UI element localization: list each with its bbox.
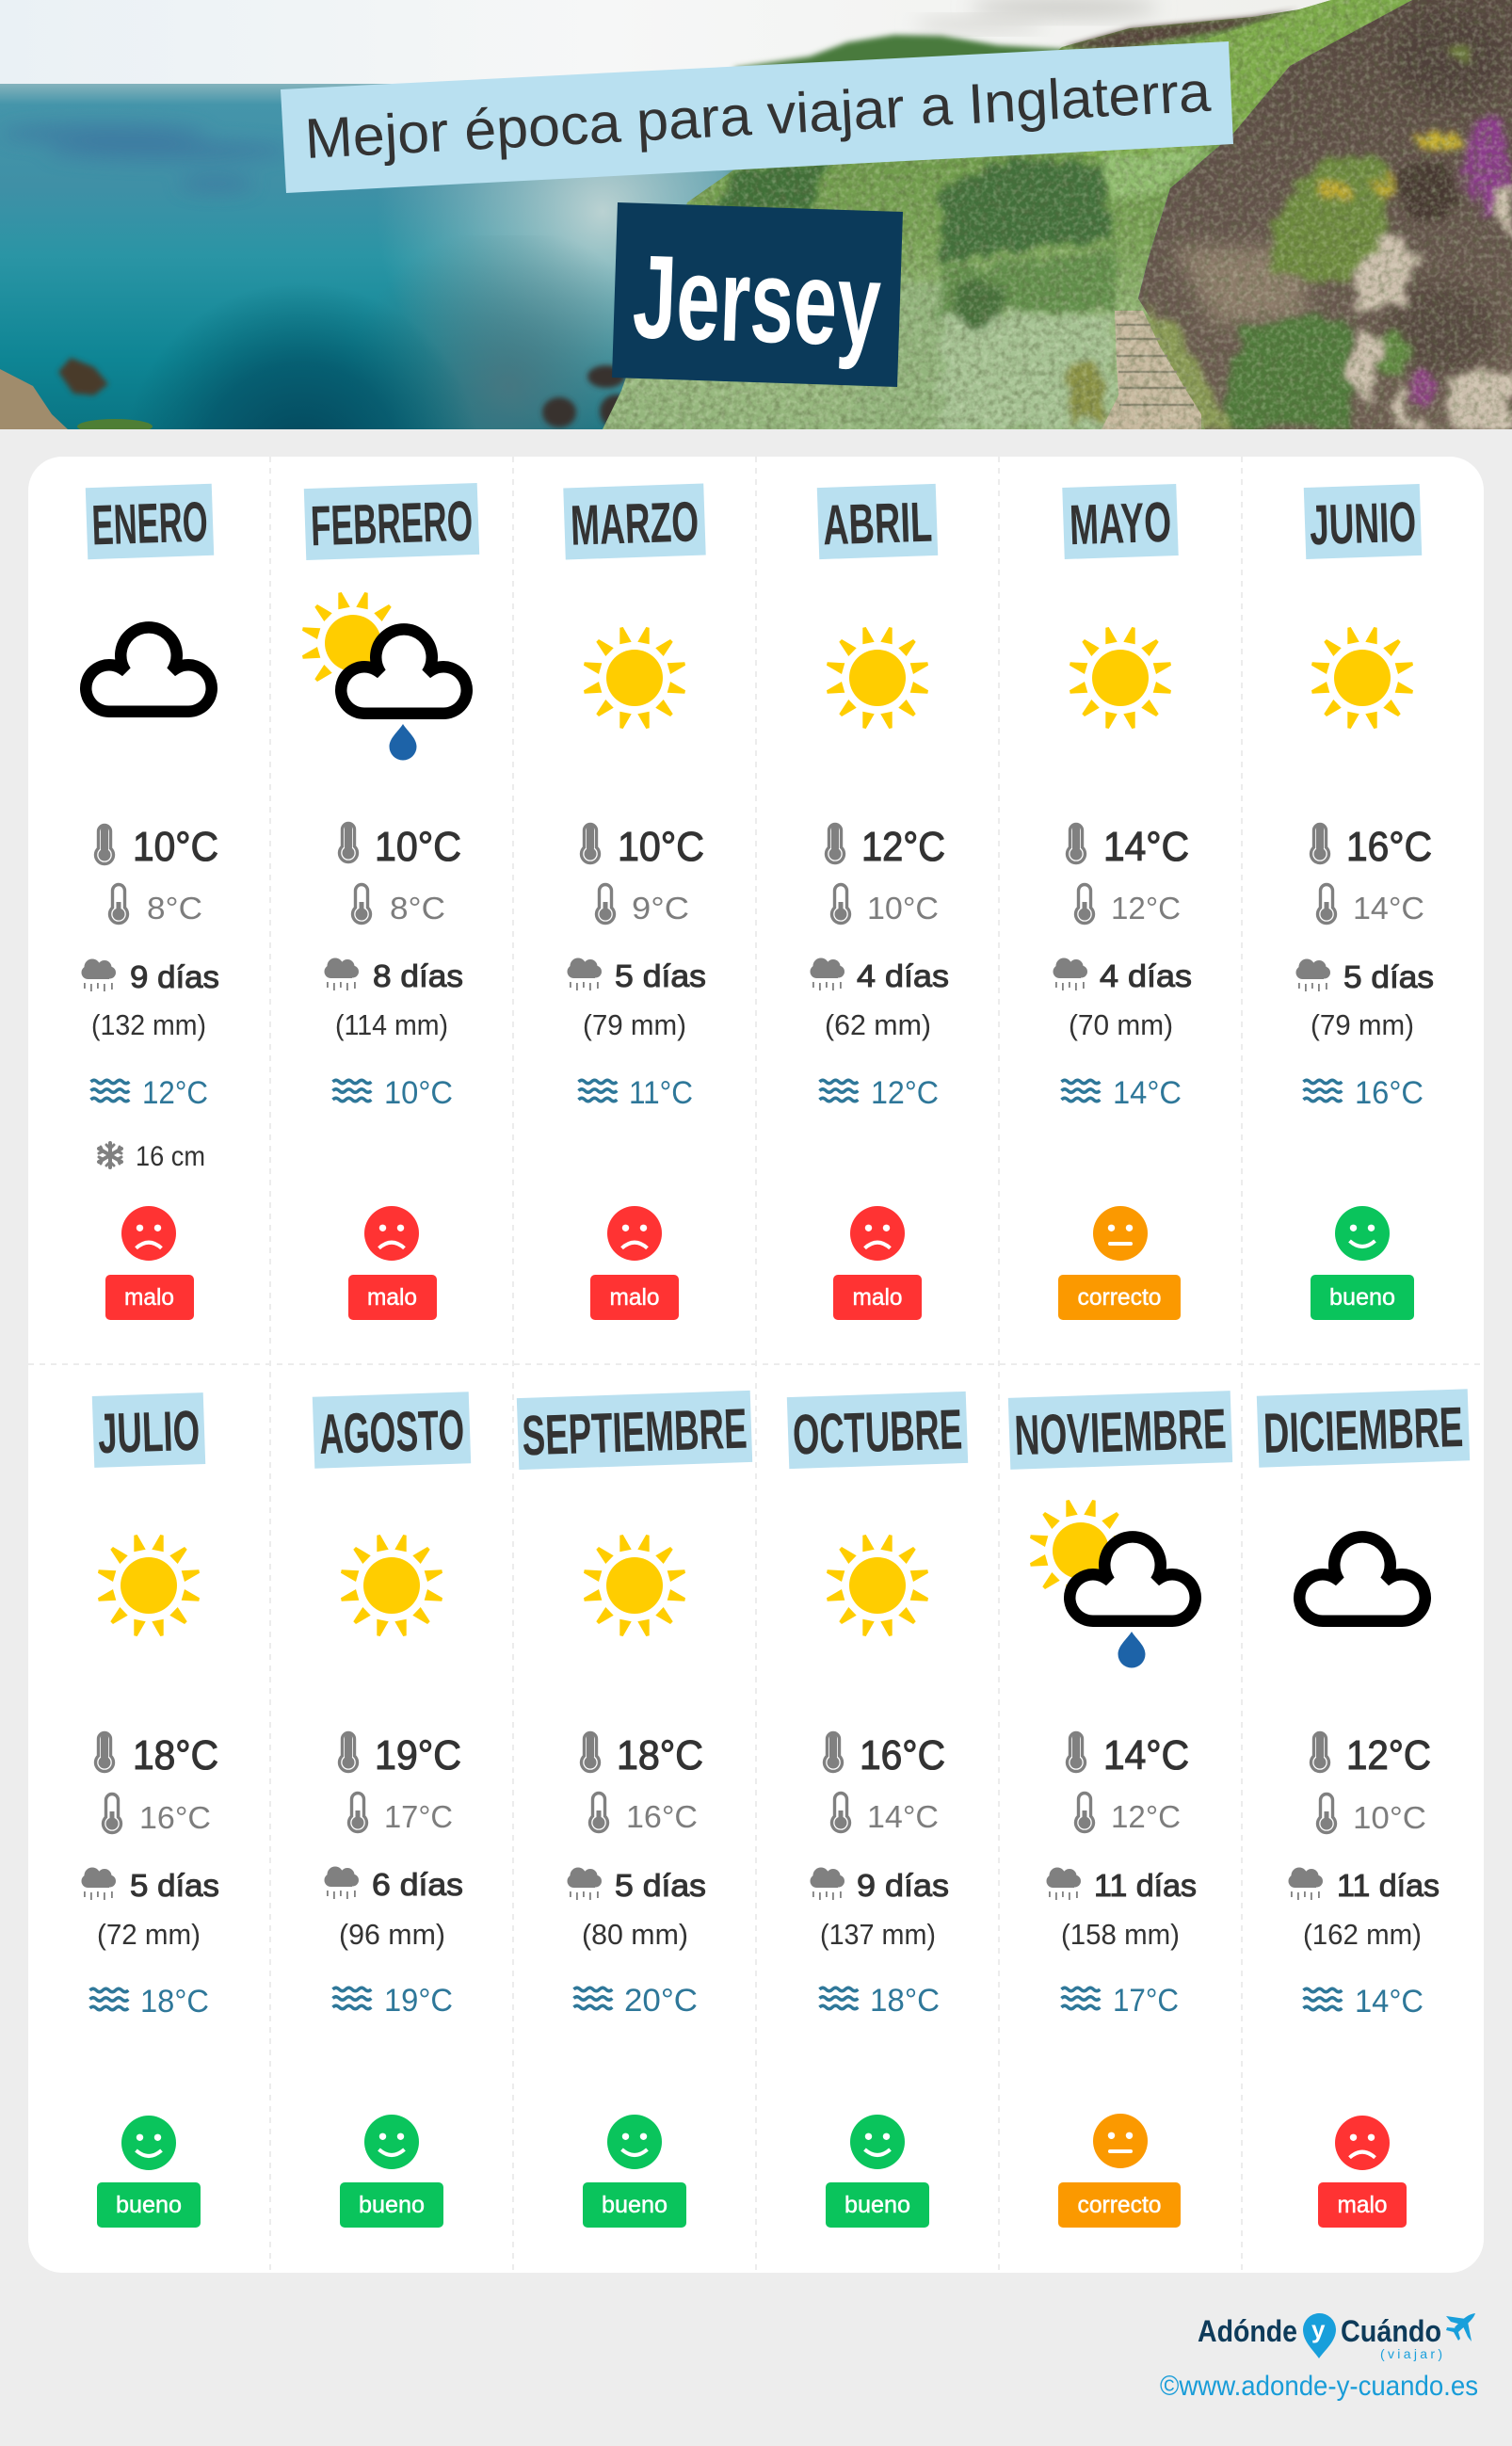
rainy days: 5 días xyxy=(615,1868,706,1903)
max temperature xyxy=(1068,1732,1189,1778)
sea temperature: 16°C xyxy=(1355,1075,1424,1111)
min temperature: 12°C xyxy=(1111,891,1181,925)
weather icon: cloud xyxy=(1299,1537,1425,1621)
month label xyxy=(1008,1391,1232,1470)
max temperature: 10°C xyxy=(618,824,704,870)
rainy days: 5 días xyxy=(130,1868,219,1903)
rainfall: (72 mm) xyxy=(97,1918,201,1951)
rainy days xyxy=(324,958,463,993)
month: abril xyxy=(810,484,949,1320)
rating badge: malo xyxy=(124,1284,174,1311)
snow xyxy=(99,1141,205,1172)
max temperature: 10°C xyxy=(133,824,218,870)
sea temperature xyxy=(819,1075,939,1111)
rainfall: (80 mm) xyxy=(582,1918,688,1951)
rainy days xyxy=(567,1868,706,1903)
month: junio xyxy=(1295,484,1434,1320)
destination name box xyxy=(612,202,903,387)
sea temperature: 17°C xyxy=(1113,1983,1179,2019)
rainy days xyxy=(810,958,949,993)
rainfall: (158 mm) xyxy=(1061,1918,1180,1951)
rating badge: malo xyxy=(853,1284,902,1311)
min temperature xyxy=(1318,1794,1426,1835)
month: enero xyxy=(81,484,219,1320)
min temperature: 8°C xyxy=(390,891,445,925)
rainy days xyxy=(1295,958,1434,994)
rainfall: (132 mm) xyxy=(91,1008,206,1041)
month label: MARZO xyxy=(570,490,700,557)
weather icon: sun xyxy=(584,627,685,729)
rainfall: (79 mm) xyxy=(583,1008,686,1041)
month label: JUNIO xyxy=(1309,491,1417,556)
rainy days xyxy=(567,958,706,993)
max temperature: 14°C xyxy=(1103,824,1189,870)
month: diciembre xyxy=(1257,1389,1470,2228)
month label xyxy=(563,484,706,559)
month: septiembre xyxy=(517,1391,752,2228)
rating badge xyxy=(1311,1275,1414,1320)
month label xyxy=(304,483,479,560)
sea temperature: 12°C xyxy=(142,1075,208,1111)
sea temperature xyxy=(1303,1075,1424,1111)
header photo: sea and green cliffs xyxy=(0,0,1512,434)
rating face xyxy=(1335,1206,1390,1261)
rating badge: malo xyxy=(610,1284,659,1311)
weather icon: cloud xyxy=(86,627,212,712)
rainy days xyxy=(1053,958,1192,993)
rating face xyxy=(1093,1206,1148,1261)
max temperature xyxy=(339,1732,461,1778)
month label: ABRIL xyxy=(822,491,933,556)
min temperature xyxy=(589,1793,698,1834)
month label: OCTUBRE xyxy=(792,1398,963,1466)
rainy days xyxy=(81,1868,219,1903)
max temperature xyxy=(96,1732,218,1778)
rating face xyxy=(1093,2114,1148,2168)
vegetation patches on the cliff xyxy=(1142,42,1510,429)
sea temperature: 20°C xyxy=(624,1983,698,2019)
sea temperature: 12°C xyxy=(871,1075,939,1111)
title text: Mejor época para viajar a Inglaterra xyxy=(303,60,1213,170)
rating badge: correcto xyxy=(1077,2192,1162,2218)
month label xyxy=(1304,484,1422,559)
month label xyxy=(92,1392,205,1468)
title band xyxy=(281,41,1233,193)
weather icon: sun xyxy=(1311,627,1413,729)
weather icon: sun xyxy=(827,627,928,729)
month label xyxy=(1062,484,1179,559)
max temperature: 12°C xyxy=(861,824,945,870)
rating face xyxy=(121,1206,176,1261)
min temperature xyxy=(348,1793,453,1834)
max temperature xyxy=(1068,824,1189,870)
rating face xyxy=(850,2115,905,2169)
green hillside xyxy=(603,0,1412,429)
max temperature xyxy=(1311,1732,1431,1778)
rating badge xyxy=(1318,2182,1407,2228)
month label xyxy=(787,1392,968,1469)
sea temperature xyxy=(574,1983,698,2019)
rainy days: 4 días xyxy=(1100,958,1192,993)
sea temperature xyxy=(333,1075,453,1111)
rainy days: 5 días xyxy=(1343,959,1434,994)
rating badge xyxy=(826,2182,929,2228)
max temperature xyxy=(96,824,218,870)
sea temperature: 18°C xyxy=(870,1983,940,2019)
icon: plane xyxy=(1446,2313,1475,2341)
weather icon: sun xyxy=(584,1535,685,1636)
month label: MAYO xyxy=(1069,491,1172,556)
month: marzo xyxy=(563,484,706,1320)
max temperature xyxy=(582,824,704,870)
rainy days xyxy=(810,1868,949,1903)
weather icon: sun xyxy=(827,1535,928,1636)
sea temperature: 18°C xyxy=(140,1984,209,2020)
brown cliff xyxy=(1138,0,1512,429)
icon: location pin xyxy=(1303,2313,1336,2358)
rainy days: 9 días xyxy=(130,959,219,994)
min temperature: 16°C xyxy=(139,1800,211,1835)
rainfall: (114 mm) xyxy=(335,1008,448,1041)
min temperature xyxy=(1075,885,1181,925)
max temperature xyxy=(582,1732,703,1778)
rating face xyxy=(364,2115,419,2169)
rating badge xyxy=(97,2182,201,2228)
distant trees xyxy=(734,35,1064,75)
min temperature xyxy=(104,1794,211,1835)
min temperature xyxy=(109,885,202,925)
rainfall: (62 mm) xyxy=(825,1008,931,1041)
month label xyxy=(86,484,214,559)
rainy days xyxy=(1288,1868,1440,1903)
sea temperature xyxy=(333,1983,453,2019)
month: julio xyxy=(81,1392,219,2228)
rainfall: (162 mm) xyxy=(1303,1918,1422,1951)
rating badge xyxy=(105,1275,194,1320)
rating badge xyxy=(1058,2182,1181,2228)
month: agosto xyxy=(313,1392,471,2228)
max temperature: 12°C xyxy=(1346,1732,1431,1778)
sea temperature xyxy=(90,1984,209,2020)
min temperature: 16°C xyxy=(626,1799,698,1834)
pale rocks xyxy=(1342,184,1512,429)
min temperature: 10°C xyxy=(1353,1800,1426,1835)
rating badge xyxy=(1058,1275,1181,1320)
month: octubre xyxy=(787,1392,968,2228)
rainy days: 5 días xyxy=(615,958,706,993)
rainy days: 6 días xyxy=(372,1867,463,1902)
rainy days: 11 días xyxy=(1094,1868,1197,1903)
footer logo: (viajar) xyxy=(1380,2346,1442,2361)
rating badge: bueno xyxy=(1329,1284,1395,1311)
min temperature xyxy=(352,885,445,925)
month label: FEBRERO xyxy=(310,490,474,557)
min temperature: 14°C xyxy=(1353,891,1424,925)
sea temperature xyxy=(1303,1984,1424,2020)
snow: 16 cm xyxy=(136,1141,205,1172)
min temperature: 10°C xyxy=(867,891,939,925)
month label: SEPTIEMBRE xyxy=(522,1397,748,1467)
rating face xyxy=(607,1206,662,1261)
min temperature xyxy=(597,885,689,925)
max temperature xyxy=(827,824,945,870)
rainy days: 9 días xyxy=(857,1868,949,1903)
min temperature xyxy=(832,885,939,925)
rating badge: correcto xyxy=(1077,1284,1162,1311)
panel: calendar xyxy=(28,457,1484,2273)
sea temperature: 11°C xyxy=(629,1075,693,1111)
rocks in the sea xyxy=(0,358,634,434)
icon: location pin: y xyxy=(1311,2315,1326,2343)
rating badge xyxy=(348,1275,437,1320)
rating face xyxy=(121,2116,176,2170)
sea temperature xyxy=(1062,1983,1179,2019)
footer url: ©www.adonde-y-cuando.es xyxy=(1160,2371,1478,2402)
weather icon: sun, cloud and rain xyxy=(302,592,467,761)
weather icon: sun, cloud and rain xyxy=(1030,1500,1196,1668)
rating face xyxy=(607,2115,662,2169)
rating badge: bueno xyxy=(359,2192,425,2218)
sea temperature: 14°C xyxy=(1355,1984,1424,2020)
sea temperature: 10°C xyxy=(384,1075,453,1111)
sea temperature xyxy=(819,1983,940,2019)
rating face xyxy=(364,1206,419,1261)
rainy days: 11 días xyxy=(1337,1868,1440,1903)
weather icon: sun xyxy=(341,1535,442,1636)
sea temperature xyxy=(1062,1075,1182,1111)
month label: NOVIEMBRE xyxy=(1014,1397,1228,1467)
sea temperature: 14°C xyxy=(1113,1075,1182,1111)
rating badge: bueno xyxy=(116,2192,182,2218)
rainfall: (96 mm) xyxy=(339,1918,445,1951)
rating badge: malo xyxy=(1337,2192,1388,2218)
max temperature xyxy=(1311,824,1432,870)
max temperature: 19°C xyxy=(375,1732,461,1778)
sea temperature xyxy=(578,1075,693,1111)
rainy days xyxy=(81,958,219,994)
month label xyxy=(517,1391,752,1470)
rainfall: (137 mm) xyxy=(820,1918,936,1951)
rainy days: 4 días xyxy=(857,958,949,993)
rainfall: (79 mm) xyxy=(1311,1008,1414,1041)
footer logo xyxy=(1198,2313,1475,2361)
max temperature: 18°C xyxy=(617,1732,703,1778)
month label xyxy=(817,484,938,559)
weather icon: sun xyxy=(1070,627,1171,729)
rating face xyxy=(850,1206,905,1261)
min temperature xyxy=(1075,1793,1181,1834)
min temperature xyxy=(832,1793,939,1834)
min temperature: 8°C xyxy=(147,891,202,925)
min temperature: 17°C xyxy=(384,1799,453,1834)
sea temperature xyxy=(90,1075,208,1111)
month label: ENERO xyxy=(90,490,209,557)
weather icon: sun xyxy=(98,1535,200,1636)
footer logo: Adónde xyxy=(1198,2314,1297,2348)
min temperature: 9°C xyxy=(632,891,689,925)
month label: JULIO xyxy=(97,1399,201,1465)
max temperature: 14°C xyxy=(1103,1732,1189,1778)
rating badge xyxy=(340,2182,443,2228)
rainfall: (70 mm) xyxy=(1069,1008,1173,1041)
month label: AGOSTO xyxy=(318,1398,465,1466)
rating badge xyxy=(590,1275,679,1320)
rainy days xyxy=(1047,1868,1197,1903)
rainy days: 8 días xyxy=(373,958,463,993)
sea temperature: 19°C xyxy=(384,1983,453,2019)
rating badge xyxy=(833,1275,922,1320)
month label xyxy=(313,1392,471,1469)
foliage texture xyxy=(537,0,1512,429)
destination name: Jersey xyxy=(631,230,883,371)
stone steps xyxy=(1102,311,1201,429)
max temperature: 16°C xyxy=(1346,824,1432,870)
max temperature xyxy=(825,1732,945,1778)
rainy days xyxy=(324,1866,463,1902)
footer logo: Cuándo xyxy=(1341,2314,1441,2348)
month: mayo xyxy=(1053,484,1192,1320)
rating badge xyxy=(583,2182,686,2228)
rating badge: malo xyxy=(367,1284,417,1311)
max temperature: 16°C xyxy=(860,1732,945,1778)
min temperature: 14°C xyxy=(867,1799,939,1834)
max temperature: 18°C xyxy=(133,1732,218,1778)
rating face xyxy=(1335,2116,1390,2170)
rating badge: bueno xyxy=(844,2192,910,2218)
month: noviembre xyxy=(1008,1391,1232,2228)
month: febrero xyxy=(302,483,479,1320)
max temperature: 10°C xyxy=(375,824,461,870)
rating badge: bueno xyxy=(602,2192,668,2218)
max temperature xyxy=(339,823,461,870)
min temperature: 12°C xyxy=(1111,1799,1181,1834)
min temperature xyxy=(1318,885,1424,925)
